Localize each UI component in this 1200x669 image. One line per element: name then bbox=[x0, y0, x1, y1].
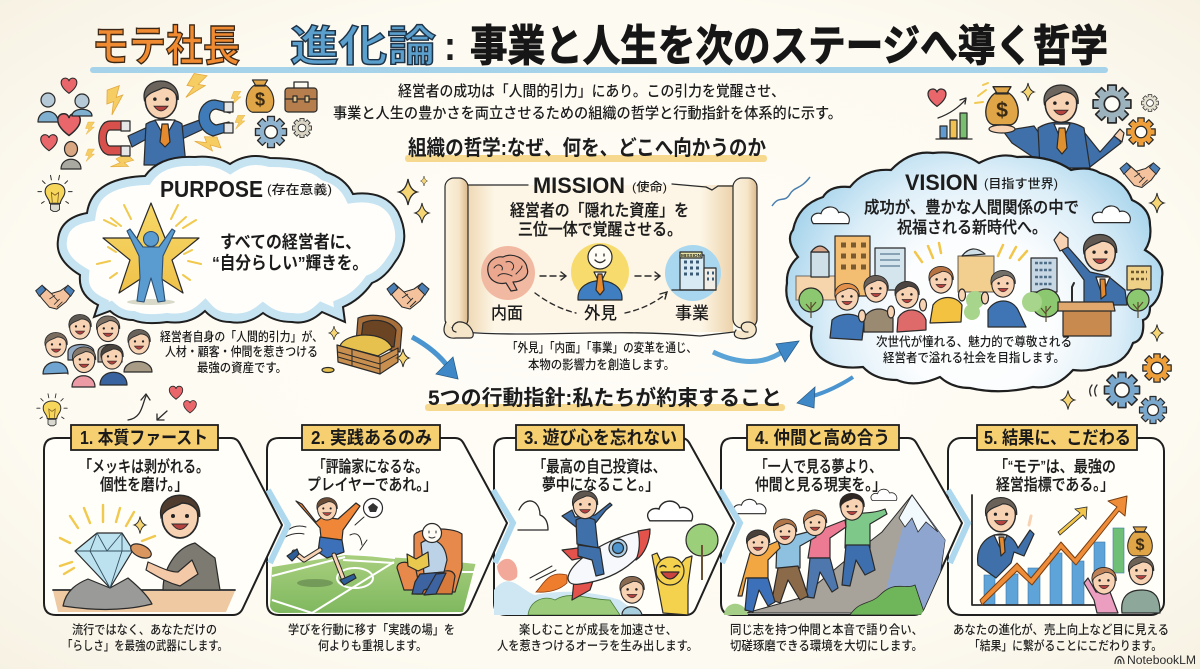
notebooklm mark: NotebookLM bbox=[1127, 655, 1196, 667]
caption 1: 流行ではなく、あなただけの bbox=[72, 623, 217, 637]
icon: treasure chest bbox=[322, 315, 409, 374]
mission statement: 経営者の「隠れた資産」を bbox=[510, 201, 689, 220]
panel: mission scroll bbox=[444, 173, 757, 339]
panel 1 bbox=[44, 425, 288, 615]
icon: handshake left bbox=[36, 285, 74, 309]
caption 3: 楽しむことが成長を加速させ、 bbox=[519, 622, 677, 637]
panel 3 bbox=[494, 425, 740, 615]
panel 1 quote: 個性を磨け。」 bbox=[100, 476, 188, 494]
icon: building circle: MISSION bbox=[681, 253, 701, 258]
purpose caption: 最強の資産です。 bbox=[197, 360, 287, 375]
panel 5 illustration: growth chart bbox=[972, 495, 1160, 613]
illustration: chart and heart bbox=[928, 89, 972, 139]
panel 2 quote: 「評論家になるな。 bbox=[313, 458, 428, 476]
icon: star with figure bbox=[97, 203, 201, 305]
panel 3 frame bbox=[494, 438, 734, 615]
icon: person circle bbox=[571, 243, 629, 301]
panel 4 frame bbox=[721, 438, 962, 615]
panel 4 chevron accent bbox=[948, 490, 968, 563]
icon: hearts and arrows bbox=[128, 386, 196, 420]
vision heading: (目指す世界) bbox=[984, 176, 1058, 191]
icon: briefcase bbox=[285, 82, 317, 112]
illustration: group of people bbox=[43, 314, 152, 387]
caption 2 bbox=[288, 622, 455, 653]
vision caption: 経営者で溢れる社会を目指します。 bbox=[883, 350, 1065, 365]
purpose heading: PURPOSE bbox=[160, 176, 263, 202]
panel 2 quote bbox=[307, 458, 437, 494]
panel 2 bbox=[267, 425, 513, 615]
mission caption: 本物の影響力を創造します。 bbox=[528, 357, 675, 372]
caption 4: 同じ志を持つ仲間と本音で語り合い、 bbox=[730, 622, 923, 637]
icon: sparkles center left bbox=[399, 176, 429, 223]
mission caption: 「外見」「内面」「事業」の変革を通じ、 bbox=[507, 340, 697, 355]
arrow: blue vision to actions bbox=[797, 377, 853, 408]
icon: gears bottom right bbox=[1090, 354, 1171, 424]
panel 2 quote: プレイヤーであれ。」 bbox=[307, 476, 437, 494]
panel: vision cloud bbox=[786, 152, 1162, 391]
caption 2: 何よりも重視します。 bbox=[318, 638, 427, 653]
icon: sparkle bottom bbox=[1061, 390, 1075, 410]
caption 5 bbox=[953, 622, 1169, 653]
panel 3 illustration: rocket bbox=[494, 491, 718, 615]
panel 5 quote: 「“モテ”は、最強の bbox=[994, 458, 1116, 476]
purpose caption: 人材・顧客・仲間を惹きつける bbox=[165, 344, 318, 359]
panel 5 quote: 経営指標である。」 bbox=[996, 476, 1114, 494]
caption 2: 学びを行動に移す「実践の場」を bbox=[288, 622, 455, 637]
illustration: clapping audience bbox=[830, 266, 1026, 340]
caption 4: 切磋琢磨できる環境を大切にします。 bbox=[730, 638, 923, 653]
panel 5 frame bbox=[948, 438, 1164, 615]
title: 進化論 bbox=[290, 24, 436, 71]
panel 3 chevron accent bbox=[720, 490, 740, 563]
caption 5: 「結果」に繋がることにこだわります。 bbox=[969, 638, 1162, 653]
purpose heading bbox=[160, 176, 332, 202]
icon: handshake mission side bbox=[387, 283, 429, 309]
vision caption bbox=[876, 334, 1072, 365]
icon: building circle bbox=[665, 245, 721, 301]
mission heading: (使命) bbox=[632, 179, 667, 194]
panel 1 chevron accent bbox=[268, 490, 288, 563]
caption 3 bbox=[497, 622, 698, 653]
title underline bbox=[90, 67, 1108, 73]
illustration: hearts and people left bbox=[38, 78, 92, 169]
panel 1 quote: 「メッキは剥がれる。 bbox=[79, 457, 209, 476]
panel 1 frame bbox=[44, 438, 282, 615]
illustration: cityscape bbox=[796, 236, 1151, 322]
intro text: 経営者の成功は「人間的引力」にあり。この引力を覚醒させ、 bbox=[398, 83, 785, 100]
caption 4 bbox=[730, 622, 923, 653]
purpose statement: すべての経営者に、 bbox=[220, 232, 361, 252]
triad labels: 内面 bbox=[491, 304, 523, 323]
vision statement: 成功が、豊かな人間関係の中で bbox=[864, 197, 1079, 217]
vision heading bbox=[905, 170, 1058, 195]
intro text bbox=[333, 83, 842, 122]
panel 5 bbox=[948, 425, 1164, 615]
icon: bulb bbox=[38, 175, 72, 211]
panel 5 label: 5. 結果に、こだわる bbox=[984, 428, 1131, 448]
icon: bulb lower bbox=[37, 394, 67, 426]
vision heading: VISION bbox=[905, 170, 978, 195]
panel 4 bbox=[721, 425, 968, 615]
caption 5: あなたの進化が、売上向上など目に見える bbox=[953, 622, 1169, 637]
icon: sparkle vision right bbox=[1151, 324, 1163, 342]
caption 1 bbox=[62, 623, 228, 653]
icon: money bag bbox=[246, 80, 274, 112]
panel: purpose cloud bbox=[58, 156, 404, 323]
mission heading: MISSION bbox=[533, 173, 625, 198]
arrows: triad flow bbox=[535, 272, 667, 313]
panel 1 illustration: polishing diamond bbox=[53, 495, 235, 612]
panel 2 chevron accent bbox=[493, 490, 513, 563]
panel 2 label: 2. 実践あるのみ bbox=[311, 428, 432, 448]
caption 3: 人を惹きつけるオーラを生み出します。 bbox=[497, 639, 698, 653]
panel 4 label: 4. 仲間と高め合う bbox=[755, 428, 890, 448]
icon: brain circle bbox=[481, 246, 535, 300]
icon: small clouds bbox=[811, 206, 1130, 224]
panel 4 illustration: climbing team bbox=[724, 489, 945, 615]
vision statement bbox=[864, 197, 1079, 237]
illustration: magnet businessman bbox=[86, 73, 245, 176]
icon: sparkle right bbox=[1150, 193, 1164, 213]
panel 5 quote bbox=[994, 458, 1116, 494]
panel 3 quote: 夢中になること。」 bbox=[542, 476, 659, 494]
panel 4 quote: 仲間と見る現実を。」 bbox=[755, 476, 886, 494]
mission caption bbox=[507, 340, 697, 372]
vision caption: 次世代が憧れる、魅力的で尊敬される bbox=[876, 334, 1072, 349]
purpose statement: “自分らしい”輝きを。 bbox=[212, 253, 368, 273]
panel 4 quote bbox=[755, 458, 886, 494]
illustration: speaker at podium bbox=[1054, 232, 1127, 336]
section heading: action guidelines: 5つの行動指針:私たちが約束すること bbox=[428, 386, 782, 410]
mission heading bbox=[533, 173, 667, 198]
arrow: blue mission to vision bbox=[713, 341, 799, 362]
purpose caption bbox=[160, 329, 323, 375]
triad labels: 外見 bbox=[584, 304, 617, 323]
purpose statement bbox=[212, 232, 368, 273]
panel 4 quote: 「一人で見る夢より、 bbox=[755, 458, 882, 476]
illustration: businessman holding money bbox=[975, 83, 1124, 168]
mission statement bbox=[510, 201, 689, 239]
title: 事業と人生を次のステージへ導く哲学 bbox=[470, 22, 1108, 71]
icon: handshake right top bbox=[1120, 163, 1160, 187]
title: : bbox=[444, 24, 456, 70]
panel 3 quote bbox=[533, 458, 666, 494]
title bbox=[92, 22, 1108, 71]
caption 1: 「らしさ」を最強の武器にします。 bbox=[62, 639, 228, 653]
triad labels: 事業 bbox=[675, 304, 709, 323]
vision statement: 祝福される新時代へ。 bbox=[897, 218, 1047, 237]
mission statement: 三位一体で覚醒させる。 bbox=[518, 220, 682, 239]
purpose heading: (存在意義) bbox=[267, 182, 332, 197]
icon: gears top bbox=[255, 116, 311, 148]
arrow: blue purpose to actions bbox=[412, 337, 458, 379]
panel 3 label: 3. 遊び心を忘れない bbox=[524, 427, 677, 448]
icon: gears top right bbox=[1093, 85, 1158, 146]
title: モテ社長 bbox=[92, 24, 240, 71]
purpose caption: 経営者自身の「人間的引力」が、 bbox=[160, 329, 323, 344]
intro text: 事業と人生の豊かさを両立させるための組織の哲学と行動指針を体系的に示す。 bbox=[333, 105, 842, 122]
panel 2 illustration: soccer and reading bbox=[270, 498, 476, 613]
panel 2 frame bbox=[267, 438, 507, 615]
section heading: philosophy: 組織の哲学:なぜ、何を、どこへ向かうのか bbox=[408, 137, 766, 160]
panel 1 quote bbox=[79, 457, 209, 494]
panel 3 quote: 「最高の自己投資は、 bbox=[533, 458, 666, 476]
panel 1 label: 1. 本質ファースト bbox=[80, 428, 208, 448]
icon: squiggle bbox=[772, 177, 810, 206]
triad labels bbox=[491, 304, 709, 323]
